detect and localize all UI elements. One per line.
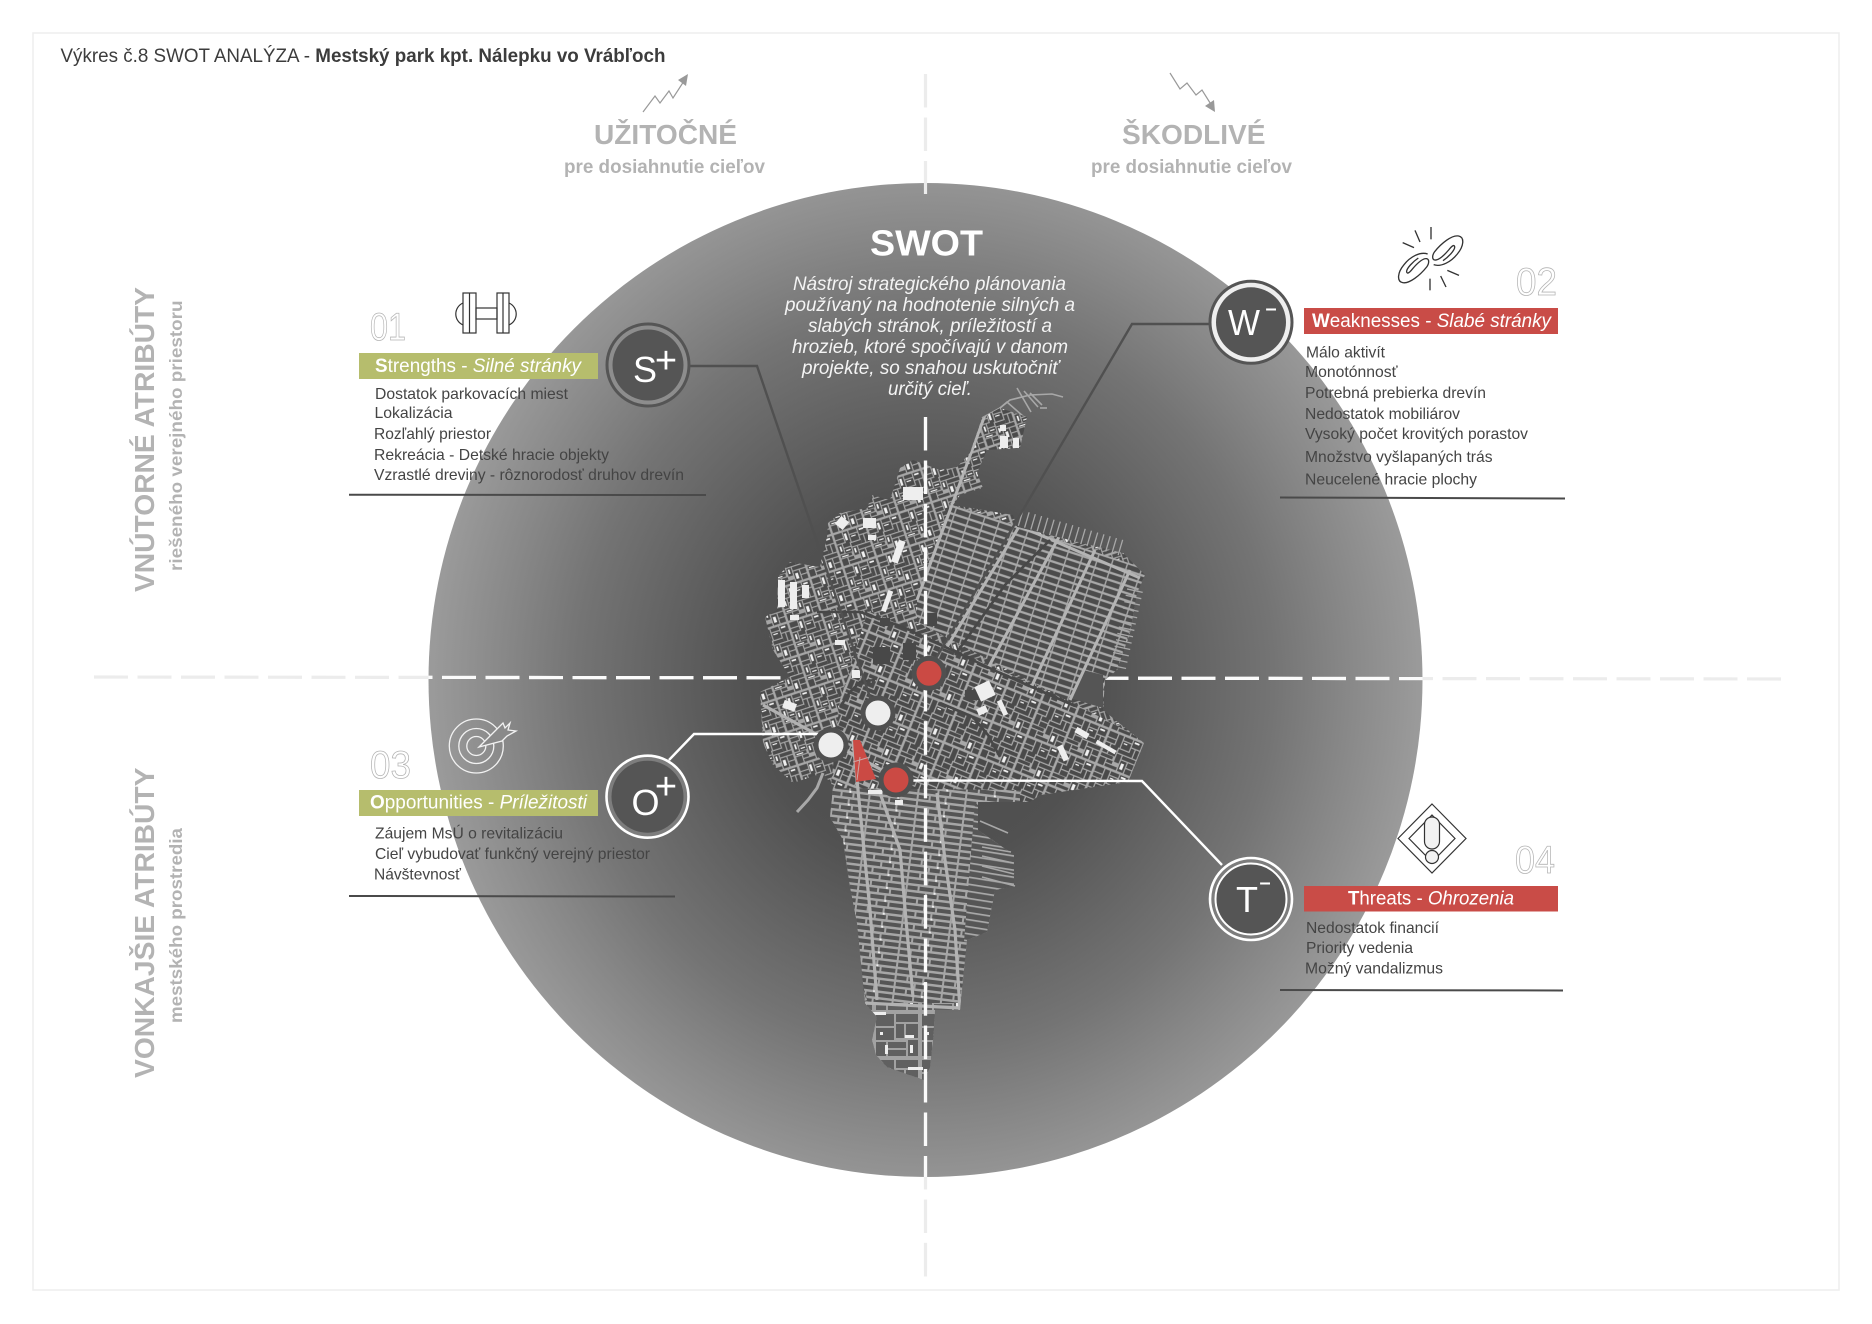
dark road ribbons — [817, 540, 1075, 757]
swot description: hrozieb, ktoré spočívajú v danom — [792, 337, 1068, 358]
weaknesses list: Monotónnosť — [1305, 364, 1398, 381]
opportunities banner — [359, 790, 598, 816]
icon: target with dart — [449, 719, 516, 773]
weaknesses label: Weaknesses - Slabé stránky — [1312, 311, 1552, 332]
map marker: red 2 — [881, 765, 911, 795]
map marker: white 2 — [816, 730, 846, 760]
badge: O+: O — [631, 782, 660, 823]
strengths list: Dostatok parkovacích miest — [375, 386, 569, 403]
leader: strengths — [690, 366, 871, 700]
strengths rule — [349, 494, 706, 496]
threats label: Threats - Ohrozenia — [1348, 888, 1514, 910]
weaknesses list — [1305, 344, 1528, 488]
heading: škodlivé: ŠKODLIVÉ — [1122, 118, 1266, 150]
strengths list: Vzrastlé dreviny - rôznorodosť druhov drevín — [374, 467, 684, 484]
swot description: projekte, so snahou uskutočniť — [801, 358, 1061, 379]
opportunities list: Návštevnosť — [374, 866, 462, 884]
swot description: Nástroj strategického plánovania — [793, 274, 1066, 295]
icon: falling arrow — [1170, 73, 1215, 112]
opportunities label: Opportunities - Príležitosti — [370, 792, 588, 814]
map marker: white 1 — [863, 698, 893, 728]
badge: S+ — [607, 324, 689, 406]
swot description — [784, 274, 1075, 400]
title: Výkres č.8 SWOT ANALÝZA - Mestský park kpt. Nálepku vo Vrábľoch — [60, 44, 666, 67]
site marker: red triangle park — [853, 740, 876, 782]
map marker: red 1 — [914, 658, 944, 688]
threats list: Nedostatok financií — [1306, 920, 1440, 937]
heading: vonkajšie atribúty: VONKAJŠIE ATRIBÚTY — [128, 767, 160, 1078]
panel: weaknesses — [1210, 227, 1565, 498]
number 02: 02 — [1516, 261, 1557, 304]
badge: O+: + — [655, 766, 677, 808]
map: north-east spur roads — [982, 388, 1063, 418]
badge: W- — [1210, 281, 1292, 363]
badge: T- — [1210, 858, 1292, 940]
weaknesses list: Nedostatok mobiliárov — [1305, 406, 1460, 423]
panel: threats — [1210, 804, 1563, 990]
swot heading: SWOT — [870, 222, 983, 264]
threats rule — [1280, 989, 1563, 992]
badge: S+: + — [655, 340, 677, 382]
weaknesses list: Neucelené hracie plochy — [1305, 472, 1477, 488]
map: east parcel stubs — [1020, 518, 1135, 668]
badge: W-: – — [1265, 298, 1277, 320]
weaknesses rule — [1280, 498, 1565, 499]
parcel avenues — [917, 415, 1140, 700]
badge: T-: – — [1259, 872, 1271, 894]
number 03: 03 — [370, 744, 411, 787]
leader: weaknesses — [935, 324, 1209, 660]
column header: beneficial — [564, 74, 765, 178]
horizontal axis — [94, 677, 1781, 679]
opportunities list — [374, 824, 651, 884]
swot description: používaný na hodnotenie silných a — [784, 295, 1075, 316]
panel: opportunities — [349, 719, 688, 896]
central gradient disc — [428, 183, 1422, 1177]
threats list: Možný vandalizmus — [1305, 960, 1443, 978]
row label: internal attributes — [129, 287, 186, 592]
settlement map — [750, 388, 1160, 1100]
badge: S+: S — [633, 349, 657, 390]
map: south-west spur — [797, 773, 823, 812]
swot description: určitý cieľ. — [888, 379, 972, 400]
column header: harmful — [1091, 73, 1292, 178]
weaknesses list: Potrebná prebierka drevín — [1305, 385, 1486, 402]
number 01: 01 — [370, 306, 406, 349]
opportunities list: Cieľ vybudovať funkčný verejný priestor — [375, 846, 651, 863]
icon: dumbbell — [456, 293, 516, 333]
strengths list: Lokalizácia — [374, 405, 453, 422]
white buildings — [778, 425, 1117, 1070]
swot description: slabých stránok, príležitostí a — [808, 316, 1052, 337]
map: south-east parcel lines — [980, 821, 1015, 886]
badge: O+ — [606, 756, 688, 838]
icon: warning diamond — [1398, 804, 1466, 873]
strengths banner — [359, 353, 598, 379]
south avenues — [763, 705, 960, 1010]
subheading: mestského prostredia — [166, 828, 186, 1023]
heading: vnútorné atribúty: VNÚTORNÉ ATRIBÚTY — [129, 287, 160, 592]
subheading: riešeného verejného priestoru — [166, 300, 186, 571]
strengths list: Rekreácia - Detské hracie objekty — [374, 447, 609, 464]
leader: opportunities — [669, 734, 818, 760]
dark plot east — [1072, 670, 1103, 708]
subheading: pre dosiahnutie cieľov — [564, 157, 765, 178]
opportunities rule — [349, 895, 675, 898]
number 04: 04 — [1515, 839, 1555, 882]
large dark blocks — [873, 613, 981, 700]
weaknesses list: Vysoký počet krovitých porastov — [1305, 426, 1528, 443]
strengths label: Strengths - Silné stránky — [375, 356, 582, 377]
threats list — [1305, 920, 1443, 978]
badge: T-: T — [1236, 879, 1258, 920]
subheading: pre dosiahnutie cieľov — [1091, 157, 1292, 178]
heading: užitočné: UŽITOČNÉ — [594, 118, 737, 150]
opportunities list: Záujem MsÚ o revitalizáciu — [375, 824, 563, 842]
weaknesses banner — [1304, 308, 1558, 334]
row label: external attributes — [128, 767, 186, 1078]
strengths list: Rozľahlý priestor — [374, 426, 492, 443]
icon: rising arrow — [643, 74, 688, 112]
panel: strengths — [349, 293, 706, 495]
leader: threats — [910, 780, 1222, 865]
strengths list — [374, 386, 684, 484]
leader lines — [669, 324, 1222, 865]
icon: broken chain — [1399, 227, 1463, 290]
threats list: Priority vedenia — [1306, 940, 1413, 957]
badge: W-: W — [1228, 302, 1260, 343]
vertical axis — [924, 74, 927, 1277]
threats banner — [1304, 886, 1558, 912]
weaknesses list: Množstvo vyšlapaných trás — [1305, 449, 1492, 466]
weaknesses list: Málo aktivít — [1306, 344, 1386, 362]
map: street tissue — [760, 408, 1145, 1080]
